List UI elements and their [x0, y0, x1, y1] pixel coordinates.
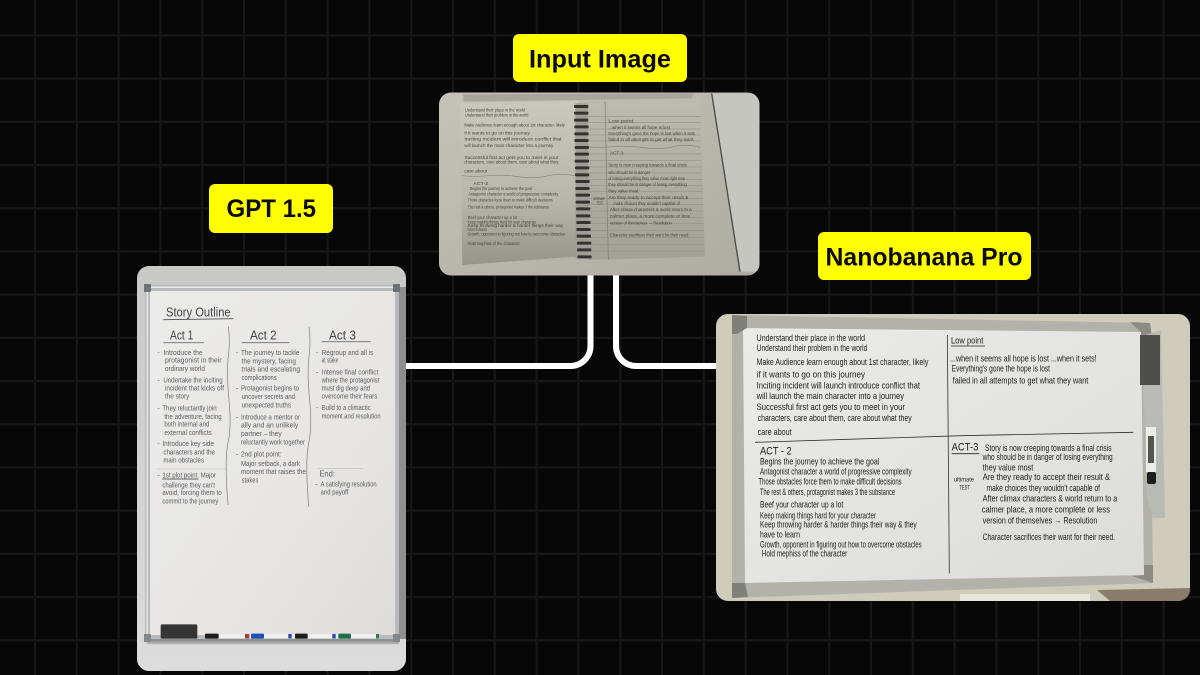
column: Act 1: -	[157, 350, 160, 357]
text: notebook handwriting, left page: Growth, opponent in figuring out how to overcome obstacles	[468, 231, 566, 236]
column: Act 2: 2nd plot point:	[241, 452, 282, 459]
text: notebook handwriting, left page: Beef your character up a lot	[468, 215, 518, 220]
column: Act 1: Introduce key side	[162, 441, 214, 448]
text: notebook handwriting, left page: characters, care about them, care about what they	[464, 159, 559, 164]
whiteboard frame	[144, 284, 406, 644]
text: notebook handwriting, left page: Inciting incident will introduce conflict that	[464, 137, 562, 142]
text: notebook handwriting, right page: they value most	[608, 189, 639, 194]
text: notebook handwriting, right page: Story is now creeping towards a final crisis	[608, 163, 687, 168]
column: Act 3: Intense final conflict	[322, 369, 378, 376]
text: Act 3 notes: After climax characters & world return to a	[983, 494, 1118, 504]
text: notebook handwriting, right page: After climax characters & world return to a	[610, 207, 692, 212]
text: notebook handwriting, right page: calmer place, a more complete or less	[610, 213, 691, 218]
column: Act 2: partner – they	[241, 431, 282, 438]
text: Act 2 notes: Hold mephiss of the character	[762, 549, 847, 559]
column: Act 2: stakes	[242, 477, 259, 484]
column: Act 3: Regroup and all is	[322, 350, 374, 357]
text: Low point notes: Low point	[951, 335, 984, 345]
column: Act 3: and payoff	[321, 489, 348, 496]
label: GPT 1.5: GPT 1.5	[226, 195, 316, 223]
text: Act 3 notes: calmer place, a more complete or less	[982, 504, 1110, 514]
column: Act 3: Act 3	[329, 327, 356, 342]
column: Act 2: The journey to tackle	[241, 350, 299, 357]
text: notebook handwriting, left page: have to learn	[468, 227, 487, 232]
text: Act 1 notes: Understand their problem in the world	[757, 343, 867, 353]
column: Act 2: -	[236, 414, 239, 421]
text: notebook handwriting, left page	[464, 108, 566, 246]
text: notebook handwriting, right page: who should be in danger	[608, 170, 650, 175]
text: notebook handwriting, right page: TEST	[597, 200, 603, 205]
column: Act 1: -	[157, 377, 160, 384]
label: GPT 1.5	[209, 184, 333, 233]
column: Act 1: -	[157, 473, 160, 480]
text: Act 3 notes: make choices they wouldn't capable of	[987, 483, 1100, 493]
text: Act 2 notes: Those obstacles force them to make difficult decisions	[758, 476, 902, 486]
column: Act 1: commit to the journey	[162, 498, 219, 505]
column: Act 2: moment that raises the	[241, 469, 306, 476]
column: Act 2: Introduce a mentor or	[241, 414, 301, 421]
text: Act 1 notes: Inciting incident will launch introduce conflict that	[757, 380, 920, 390]
panel: GPT 1.5 whiteboard	[137, 266, 406, 671]
text: Act 3 notes: Are they ready to accept their result &	[983, 472, 1111, 482]
column: Act 3: A satisfying resolution	[321, 482, 377, 489]
text: Act 1 notes: care about	[758, 427, 792, 437]
text: Act 3 notes: Story is now creeping towards a final crisis	[985, 443, 1112, 453]
column: Act 1: challenge they can't	[162, 482, 215, 489]
column: Act 3: overcome their fears	[322, 393, 378, 400]
text: Act 3 notes: ACT-3	[952, 442, 978, 454]
column: Act 3: -	[316, 369, 319, 376]
column: Act 2: -	[236, 452, 239, 459]
column: Act 2: uncover secrets and	[242, 394, 295, 401]
column: Act 2: Act 2	[250, 327, 277, 342]
text: notebook handwriting, right page: Low point	[608, 119, 634, 124]
text: Act 1 notes: Successful first act gets you to meet in your	[757, 402, 905, 412]
text: notebook handwriting, right page: ultimate	[593, 196, 605, 201]
icon: notebook spiral binding	[574, 103, 592, 258]
text: notebook handwriting, right page: make choices they wouldn't capable of	[613, 201, 681, 206]
column: Act 1: -	[157, 441, 160, 448]
column: Act 1: protagonist in their	[165, 358, 222, 365]
column: Act 1: Act 1	[170, 327, 193, 342]
column: Act 2: trials and escalating	[242, 367, 300, 374]
column: Act 1: They reluctantly join	[162, 406, 217, 413]
text: notebook handwriting, left page: The rest & others, protagonist makes 3 the substance	[468, 204, 550, 209]
text: notebook handwriting, left page: Successful first act gets you to meet in your	[464, 155, 559, 160]
column: Act 1: the story	[165, 393, 190, 400]
text: Act 3 notes: Character sacrifices their want for their need.	[983, 532, 1115, 542]
text: Act 1 notes: if it wants to go on this journey	[757, 369, 865, 379]
icon: marker tray with eraser and marker	[1140, 330, 1165, 518]
text: notebook handwriting, left page: Make Audience learn enough about 1st character, likely	[464, 123, 566, 128]
text: Act 3 notes: who should be in danger of losing everything	[982, 452, 1113, 462]
column: Act 1: characters and the	[163, 449, 215, 456]
heading: Story Outline: Story Outline	[166, 305, 231, 320]
text: Act 2 notes: ACT - 2	[760, 445, 792, 457]
text: Act 2 notes: Antagonist character a world of progressive complexity	[760, 466, 912, 476]
text: Act 2 notes: Begins the journey to achieve the goal	[760, 456, 879, 466]
column: Act 2: Major setback, a dark	[241, 461, 300, 468]
column: Act 3	[315, 327, 381, 496]
panel: input notebook photo	[439, 92, 760, 276]
text: notebook handwriting, right page: ...when it seems all hope is lost	[608, 125, 671, 130]
text: notebook handwriting, left page: Begins the journey to achieve the goal	[470, 186, 532, 191]
column: Act 3: -	[315, 482, 318, 489]
text: notebook handwriting, right page	[593, 119, 696, 238]
column: Act 3: -	[316, 350, 319, 357]
text: Act 2 notes: Keep making things hard for your character	[760, 510, 876, 520]
column: Act 1: ordinary world	[165, 366, 205, 373]
column: Act 1: Undertake the inciting	[163, 377, 223, 384]
column: Act 2: -	[236, 350, 239, 357]
board dividers	[755, 432, 1133, 442]
text: Act 3 notes	[952, 442, 1118, 542]
column: Act 1: the adventure, facing	[164, 414, 222, 421]
column: Act 1: -	[157, 406, 160, 413]
text: Act 2 notes	[758, 445, 922, 559]
text: Act 2 notes: have to learn	[760, 530, 800, 540]
column: Act 3: where the protagonist	[321, 377, 379, 384]
column: Act 3: -	[316, 405, 319, 412]
text: notebook handwriting, left page: Understand their problem in the world	[465, 113, 529, 118]
column: Act 2: unexpected truths	[242, 402, 291, 409]
text: Act 1 notes: characters, care about them, care about what they	[758, 413, 912, 423]
text: notebook handwriting, left page: care about	[464, 168, 488, 173]
column: Act 2: Protagonist begins to	[241, 386, 299, 393]
column: Act 2	[236, 327, 306, 484]
text: notebook handwriting, left page: Keep making things hard for your character	[468, 219, 536, 224]
column: Act 1: avoid, forcing them to	[162, 490, 222, 497]
column: Act 3: Build to a climactic	[322, 405, 371, 412]
text: notebook handwriting, left page: Understand their place in the world	[465, 108, 525, 113]
text: Act 3 notes: version of themselves → Resolution	[983, 515, 1097, 525]
text: Act 3 notes: ultimate	[954, 477, 974, 484]
wavy column dividers	[226, 327, 230, 505]
photo strip along the bottom edge	[960, 588, 1190, 602]
text: notebook handwriting, left page: Antagonist character a world of progressive complexity	[468, 192, 559, 197]
text: notebook handwriting, left page: if it wants to go on this journey	[464, 130, 531, 135]
text: notebook handwriting, left page: will launch the main character into a journey	[464, 143, 554, 148]
text: notebook handwriting, right page: they should be in danger of losing everything	[608, 182, 687, 187]
text: notebook handwriting, right page: ACT-3	[610, 150, 624, 155]
column: Act 3: must dig deep and	[322, 386, 370, 393]
text: notebook handwriting, right page: failed in all attempts to get what they want	[608, 137, 694, 142]
column: Act 1: main obstacles	[163, 458, 204, 465]
text: notebook handwriting, right page: Are they ready to accept their result &	[608, 195, 689, 200]
text: Act 2 notes: Beef your character up a lot	[760, 500, 844, 510]
text: Act 2 notes: Keep throwing harder & harder things their way & they	[760, 520, 917, 530]
text: Act 2 notes: Growth, opponent in figuring out how to overcome obstacles	[760, 540, 922, 550]
text: Act 1 notes: Make Audience learn enough about 1st character, likely	[757, 357, 929, 367]
column: Act 1	[157, 327, 225, 505]
label: Nanobanana Pro: Nanobanana Pro	[826, 244, 1022, 272]
label: Nanobanana Pro	[818, 232, 1031, 280]
label: Input Image	[513, 34, 687, 82]
text: Low point notes	[950, 335, 1097, 385]
text: Act 2 notes: The rest & others, protagonist makes 3 the substance	[760, 487, 895, 497]
column: Act 1: 1st plot point: Major	[162, 473, 217, 480]
text: notebook handwriting, right page: Character sacrifices their want for their need	[610, 233, 689, 238]
arrow: connector from input to Nanobanana Pro	[616, 272, 716, 366]
text: Act 3 notes: TEST	[959, 484, 970, 491]
column: Act 2: reluctantly work together	[241, 439, 306, 446]
text: notebook handwriting, left page: Keep throwing harder & harder things their way	[468, 223, 564, 228]
text: Low point notes: ...when it seems all hope is lost ...when it sets!	[950, 354, 1097, 364]
column: Act 2: -	[236, 386, 239, 393]
column: Act 1: incident that kicks off	[165, 386, 224, 393]
column: Act 3: moment and resolution	[322, 413, 381, 420]
text: notebook handwriting, left page: Hold mephiss of the character	[468, 241, 520, 246]
column: Act 3: End:	[319, 469, 335, 479]
column: Act 3: at stake	[322, 357, 338, 364]
arrow: connector from input to GPT 1.5	[406, 272, 590, 366]
column: Act 2: complications	[242, 375, 277, 382]
panel: Nanobanana Pro whiteboard	[716, 314, 1190, 602]
label: Input Image: Input Image	[529, 46, 671, 74]
text: Act 1 notes: will launch the main character into a journey	[756, 391, 904, 401]
text: Act 3 notes: they value most	[983, 463, 1034, 473]
icon: eraser and markers on tray	[161, 624, 380, 639]
text: Low point notes: Everything's gone the hope is lost	[952, 364, 1050, 374]
text: Low point notes: failed in all attempts to get what they want	[953, 375, 1089, 385]
column: Act 1: external conflicts	[164, 430, 212, 437]
whiteboard frame	[732, 315, 1153, 598]
column: Act 2: ally and an unlikely	[241, 423, 299, 430]
column: Act 1: Introduce the	[163, 350, 203, 357]
text: notebook handwriting, right page: of losing everything they value most right now	[608, 176, 686, 181]
text: Act 1 notes	[756, 333, 929, 437]
text: notebook handwriting, left page: Those obstacles force them to make difficult decisions	[468, 198, 553, 203]
column: Act 2: the mystery, facing	[242, 358, 296, 365]
column: Act 1: both internal and	[164, 422, 209, 429]
text: Act 1 notes: Understand their place in the world	[757, 333, 865, 343]
text: notebook handwriting, left page: ACT-2	[473, 181, 489, 186]
text: notebook handwriting, right page: Everything's gone the hope is lost when it sets	[608, 131, 696, 136]
text: notebook handwriting, right page: version of themselves → Resolution	[610, 220, 672, 225]
